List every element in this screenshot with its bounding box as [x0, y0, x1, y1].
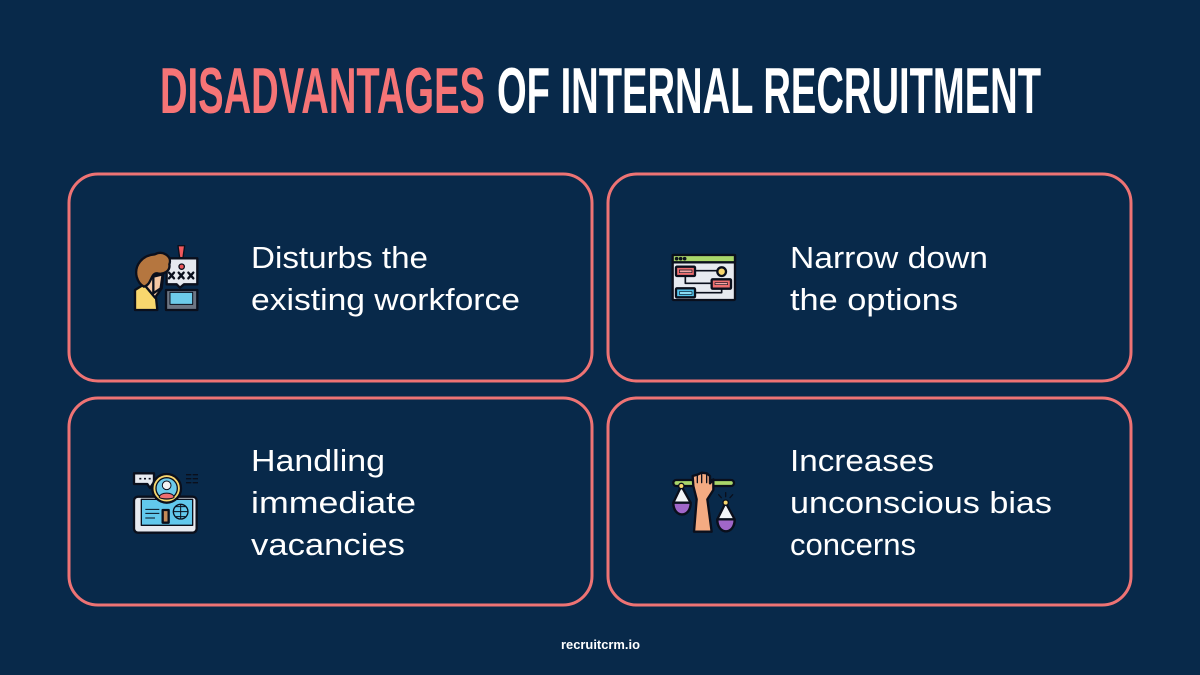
- text: narrow down the options: [790, 240, 988, 317]
- text: increases unconscious bias concerns: concerns: [790, 527, 916, 562]
- icon: hand holding scale: [673, 473, 735, 532]
- text: increases unconscious bias concerns: unconscious bias: [790, 485, 1052, 520]
- panel: disturbs the existing workforce: [69, 174, 592, 381]
- text: handling immediate vacancies: [251, 443, 416, 562]
- text: handling immediate vacancies: Handling: [251, 443, 385, 478]
- panel: increases unconscious bias concerns: [608, 398, 1131, 605]
- text: increases unconscious bias concerns: Increases: [790, 443, 934, 478]
- title: DISADVANTAGES: [160, 54, 485, 127]
- icon: workflow window: [673, 255, 735, 300]
- text: disturbs the existing workforce: Disturbs the: [251, 240, 428, 275]
- title: [160, 54, 1041, 127]
- text: narrow down the options: Narrow down: [790, 240, 988, 275]
- icon: stressed person with laptop: [135, 246, 197, 310]
- text: disturbs the existing workforce: existing workforce: [251, 282, 520, 317]
- panel: narrow down the options: [608, 174, 1131, 381]
- text: handling immediate vacancies: vacancies: [251, 527, 405, 562]
- text: disturbs the existing workforce: [251, 240, 520, 317]
- text: handling immediate vacancies: immediate: [251, 485, 416, 520]
- text: increases unconscious bias concerns: [790, 443, 1052, 562]
- panel: handling immediate vacancies: [69, 398, 592, 605]
- footer brand: recruitcrm.io: [561, 637, 640, 652]
- text: narrow down the options: the options: [790, 282, 958, 317]
- icon: tablet with magnifier: [134, 473, 198, 533]
